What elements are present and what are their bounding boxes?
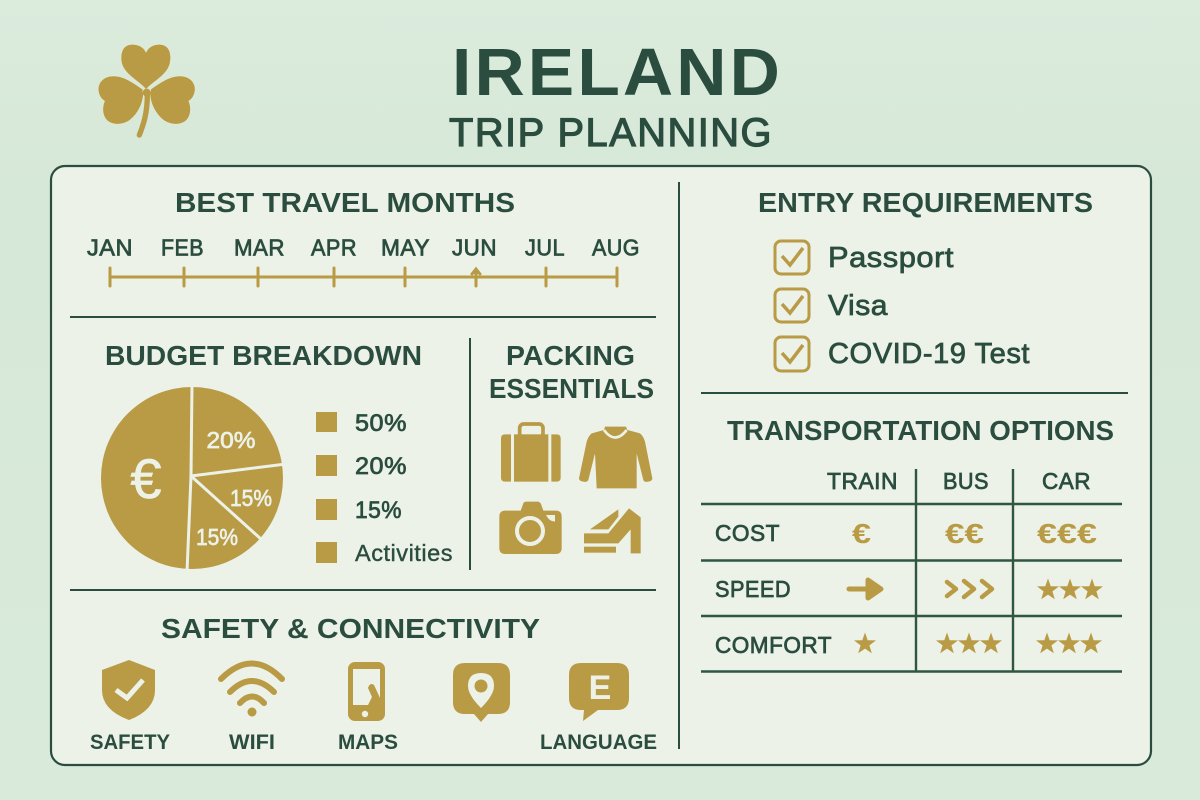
panel: transportation options — [701, 415, 1122, 672]
pie chart: 15% — [196, 524, 238, 550]
subtitle: TRIP PLANNING — [449, 111, 773, 155]
checklist — [775, 241, 1030, 371]
comparison table: CAR — [1042, 468, 1091, 494]
pie chart: € — [130, 447, 162, 510]
panel: safety and connectivity — [90, 613, 657, 754]
main panel — [51, 166, 1151, 765]
heading: packing essentials — [489, 340, 654, 404]
month labels: JUL — [525, 234, 565, 260]
icon: language bubble: E — [589, 669, 611, 707]
heading: packing essentials: ESSENTIALS — [489, 373, 654, 404]
panel: entry requirements — [758, 187, 1093, 371]
icon: arrow — [849, 580, 881, 598]
heading: entry requirements: ENTRY REQUIREMENTS — [758, 187, 1093, 218]
pie legend: 20% — [355, 453, 407, 480]
pie chart — [101, 384, 286, 572]
checklist: Visa — [828, 290, 888, 322]
panel: best travel months — [87, 187, 640, 286]
pie chart: 20% — [206, 427, 256, 453]
icon: map pin — [453, 663, 510, 722]
comparison table: €€ — [945, 518, 985, 549]
icon: phone — [348, 662, 385, 721]
icon labels: SAFETY — [90, 731, 170, 754]
heading: budget breakdown: BUDGET BREAKDOWN — [105, 340, 422, 371]
icon labels — [90, 731, 657, 754]
month labels: AUG — [592, 234, 640, 260]
heading: transportation options: TRANSPORTATION OPTIONS — [727, 415, 1114, 446]
comparison table: COST — [715, 520, 780, 546]
pie legend: 50% — [355, 410, 407, 437]
icon labels: MAPS — [338, 731, 398, 754]
icon: language bubble — [569, 663, 629, 721]
checklist: COVID-19 Test — [828, 338, 1030, 370]
icon: camera — [499, 502, 562, 554]
icon: shield — [102, 660, 155, 720]
checklist: Passport — [828, 242, 954, 274]
comparison table — [701, 468, 1122, 672]
month labels: JAN — [87, 234, 133, 260]
icon labels: WIFI — [229, 731, 275, 754]
icon: high heel shoe — [584, 508, 641, 553]
panel: budget breakdown — [101, 340, 453, 572]
icon: shamrock — [98, 44, 195, 135]
month labels: FEB — [161, 234, 204, 260]
timeline — [110, 268, 617, 286]
month labels: APR — [311, 234, 357, 260]
comparison table: € — [852, 518, 872, 549]
icon: chevrons — [947, 581, 992, 597]
heading: safety and connectivity: SAFETY & CONNECTIVITY — [161, 613, 540, 644]
icon: wifi — [221, 664, 282, 716]
icon: sweater — [579, 427, 652, 488]
pie legend — [316, 410, 453, 566]
comparison table: TRAIN — [827, 468, 898, 494]
comparison table: €€€ — [1037, 518, 1098, 549]
title: IRELAND — [452, 35, 783, 110]
heading: packing essentials: PACKING — [506, 340, 635, 371]
month labels: JUN — [452, 234, 497, 260]
month labels — [87, 234, 640, 260]
month labels: MAY — [381, 234, 430, 260]
comparison table: SPEED — [715, 576, 791, 602]
icon: suitcase — [501, 424, 561, 482]
pie legend: Activities — [355, 540, 453, 566]
comparison table: BUS — [943, 468, 989, 494]
icon labels: LANGUAGE — [540, 731, 657, 754]
heading: best travel months: BEST TRAVEL MONTHS — [175, 187, 515, 218]
month labels: MAR — [234, 234, 285, 260]
comparison table: COMFORT — [715, 632, 832, 658]
star ratings — [854, 578, 1103, 653]
panel: packing essentials — [489, 340, 654, 554]
pie chart: 15% — [230, 485, 272, 511]
pie legend: 15% — [355, 497, 402, 524]
